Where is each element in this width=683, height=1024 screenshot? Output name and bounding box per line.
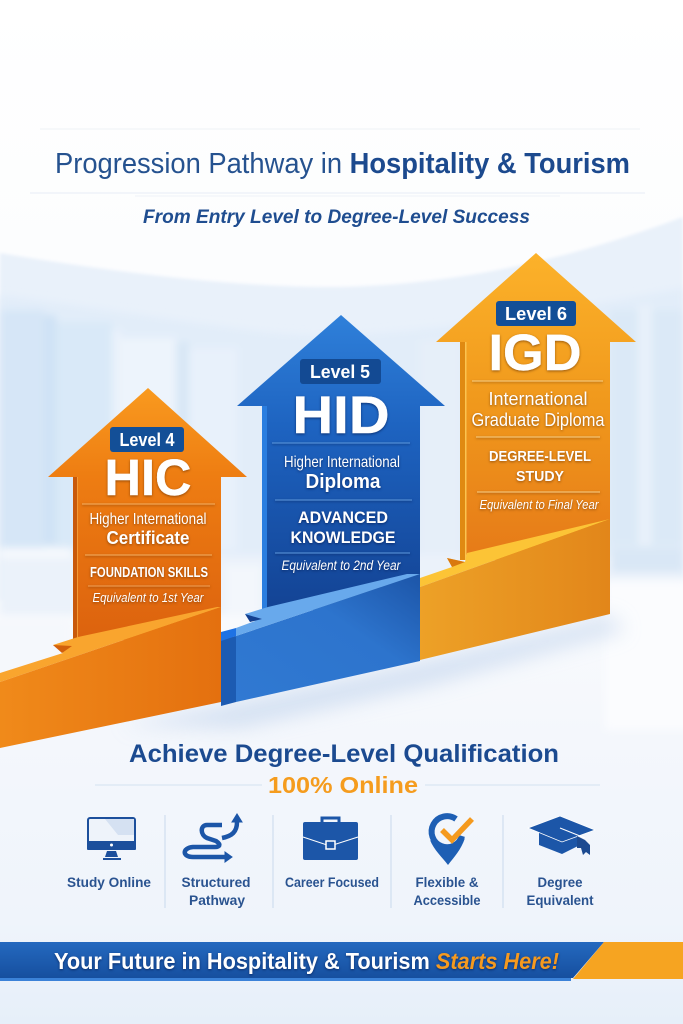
- equivalence: 1st Year: Equivalent to 1st Year: [92, 590, 204, 605]
- equivalence: 2nd Year: Equivalent to 2nd Year: [282, 558, 401, 573]
- benefit: Study Online: [67, 818, 151, 890]
- label: Degree: [538, 875, 583, 890]
- ribbon step: orange: [0, 607, 221, 748]
- benefit: Career Focused: [273, 815, 379, 908]
- badge: Level 5: Level 5: [310, 362, 370, 382]
- qualification name: Higher International Diploma: [272, 443, 412, 500]
- qualification name: International Graduate Diploma: International: [488, 389, 588, 409]
- badge: Level 4: Level 4: [120, 430, 174, 450]
- qualification name: Higher International Certificate: Certificate: [106, 528, 190, 548]
- ribbon step: gold: [420, 519, 610, 660]
- subtitle: From Entry Level to Degree-Level Success: [143, 207, 530, 228]
- benefit: Flexible & Accessible: Accessible: [414, 893, 481, 908]
- label: Study Online: [67, 875, 151, 890]
- icon: location pin with check: [430, 816, 472, 865]
- ribbon step: blue: [221, 574, 420, 706]
- focus: Degree-Level Study: [489, 448, 591, 485]
- focus: Advanced Knowledge: [290, 509, 396, 547]
- equivalence: Final Year: [477, 492, 600, 512]
- tagline: 100% Online: 100% Online: [268, 772, 418, 798]
- qualification name: International Graduate Diploma: [472, 381, 605, 437]
- accent: orange stripe: [573, 942, 683, 979]
- qualification name: Higher International Certificate: Higher International: [90, 511, 206, 528]
- benefit: Degree Equivalent: [503, 815, 595, 908]
- badge: Level 4: [110, 427, 184, 452]
- focus: Degree-Level Study: STUDY: [516, 468, 564, 485]
- badge: Level 5: [300, 359, 381, 384]
- benefit: Degree Equivalent: Equivalent: [526, 893, 594, 908]
- focus: Advanced Knowledge: KNOWLEDGE: [290, 529, 396, 547]
- icon: graduation cap: [528, 816, 595, 855]
- icon: briefcase: [303, 818, 358, 860]
- qualification name: Higher International Diploma: Higher International: [284, 454, 400, 471]
- code: HIC: HIC: [104, 449, 192, 506]
- badge: Level 6: Level 6: [505, 304, 567, 324]
- footer banner: [0, 942, 683, 981]
- heading: Achieve Degree-Level Qualification: Achieve Degree-Level Qualification: [129, 740, 559, 768]
- benefit: Structured Pathway: [165, 814, 250, 908]
- qualification name: International Graduate Diploma: Graduate Diploma: [472, 410, 605, 430]
- focus: Degree-Level Study: DEGREE-LEVEL: [489, 448, 591, 465]
- label: Career Focused: [285, 875, 379, 890]
- code: IGD: IGD: [488, 324, 582, 381]
- title: Progression Pathway in Hospitality & Tourism: [55, 148, 630, 180]
- arrow: Level 5 HID: [237, 315, 445, 610]
- benefit: Flexible & Accessible: [391, 815, 481, 908]
- equivalence: Final Year: Equivalent to Final Year: [480, 497, 599, 512]
- ribbon floor shadow: [120, 616, 625, 728]
- qualification name: Higher International Certificate: [82, 504, 215, 555]
- icon: winding path: [185, 814, 242, 862]
- focus: Foundation Skills: FOUNDATION SKILLS: [90, 565, 208, 581]
- icon: monitor: [87, 818, 136, 860]
- label: Structured: [182, 875, 250, 890]
- qualification name: Higher International Diploma: Diploma: [306, 471, 381, 493]
- code: HID: HID: [292, 386, 390, 445]
- arrow: Level 6 IGD: [436, 253, 636, 560]
- label: Flexible &: [416, 875, 479, 890]
- arrow: Level 4 HIC: [48, 388, 247, 640]
- banner text: Your Future in Hospitality & Tourism Starts Here!: [54, 948, 559, 974]
- benefit: Structured Pathway: Pathway: [189, 893, 245, 908]
- badge: Level 6: [496, 301, 576, 326]
- equivalence: 2nd Year: [275, 553, 410, 573]
- focus: Advanced Knowledge: ADVANCED: [298, 509, 388, 527]
